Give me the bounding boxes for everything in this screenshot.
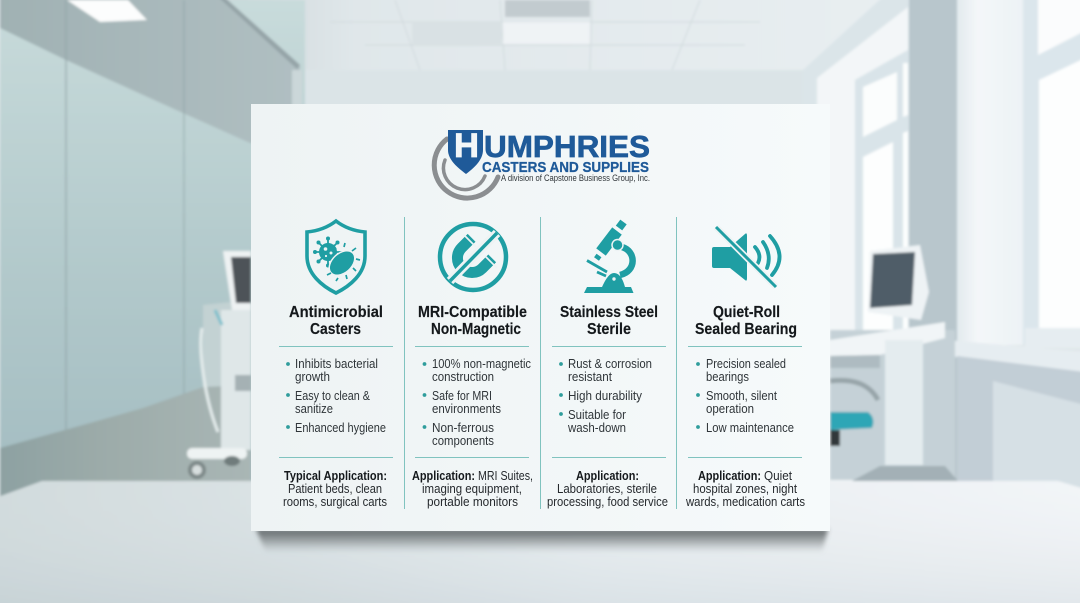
benefits list: 100% non-magnetic (432, 356, 531, 371)
logo subtitle: CASTERS AND SUPPLIES (482, 159, 649, 176)
card shadow (256, 529, 828, 553)
application text: processing, food service (547, 494, 668, 509)
rules (688, 346, 802, 458)
benefits list: Inhibits bacterial (295, 356, 378, 371)
application text: Typical Application: (284, 468, 387, 483)
application text: wards, medication carts (685, 494, 805, 509)
title: Non-Magnetic (431, 321, 521, 338)
column: stainless steel (547, 222, 668, 509)
icon: shield with microbes (307, 221, 365, 293)
benefits list: Low maintenance (706, 420, 794, 435)
application text: hospital zones, night (693, 481, 797, 496)
logo shield with H (448, 127, 483, 174)
benefits list: bearings (706, 369, 749, 384)
icon: muted speaker (712, 227, 780, 287)
title: Antimicrobial (289, 304, 383, 321)
application text: portable monitors (427, 494, 518, 509)
white card panel (251, 104, 830, 531)
benefits list (286, 356, 386, 435)
logo (434, 127, 650, 198)
application text (685, 468, 805, 509)
title: Casters (310, 321, 361, 338)
benefits list: Safe for MRI (432, 388, 492, 403)
glass partition (0, 0, 305, 500)
benefits list (696, 356, 794, 435)
ceiling (222, 0, 885, 70)
back wall (300, 70, 820, 110)
rules (279, 346, 393, 458)
title (418, 304, 527, 338)
benefits list: Smooth, silent (706, 388, 777, 403)
title (560, 304, 658, 338)
benefits list: Easy to clean & (295, 388, 370, 403)
benefits list: wash-down (567, 420, 626, 435)
application text: rooms, surgical carts (283, 494, 387, 509)
title: Quiet-Roll (713, 304, 780, 321)
benefits list: operation (706, 401, 754, 416)
title: MRI-Compatible (418, 304, 527, 321)
title: Sterile (587, 321, 631, 338)
title (289, 304, 383, 338)
column: antimicrobial casters (279, 221, 393, 509)
application text: Quiet (764, 468, 792, 483)
icon: crossed-out magnet (440, 224, 506, 290)
title: Sealed Bearing (695, 321, 797, 338)
application text: Application: (576, 468, 639, 483)
column dividers (404, 217, 676, 509)
benefits list: components (432, 433, 494, 448)
benefits list: resistant (568, 369, 612, 384)
application text: Application: (412, 468, 475, 483)
benefits list (423, 356, 531, 448)
right monitor and dental cart (830, 245, 958, 481)
application text (412, 468, 533, 509)
left medical cart and monitor (187, 251, 251, 479)
benefits list: Enhanced hygiene (295, 420, 386, 435)
benefits list: environments (432, 401, 501, 416)
application text: Application: (698, 468, 761, 483)
benefits list: construction (432, 369, 494, 384)
logo division line: A division of Capstone Business Group, Inc. (501, 173, 650, 183)
right wall and windows (803, 0, 1080, 490)
column: MRI-compatible (412, 224, 533, 509)
table top (0, 481, 1080, 603)
benefits list (559, 356, 652, 435)
logo rings (434, 139, 498, 198)
benefits list: High durability (568, 388, 642, 403)
benefits list: Suitable for (568, 407, 627, 422)
benefits list: sanitize (295, 401, 333, 416)
benefits list: Non-ferrous (432, 420, 494, 435)
rules (415, 346, 529, 458)
title: Stainless Steel (560, 304, 658, 321)
logo shield with H: H (454, 127, 479, 165)
application text: Patient beds, clean (288, 481, 382, 496)
application text: Laboratories, sterile (557, 481, 657, 496)
application text (547, 468, 668, 509)
title (695, 304, 797, 338)
application text: MRI Suites, (478, 468, 533, 483)
icon: microscope (584, 222, 634, 293)
logo wordmark: UMPHRIES (484, 129, 650, 164)
rules (552, 346, 666, 458)
application text (283, 468, 387, 509)
column: quiet-roll (685, 227, 805, 509)
benefits list: Rust & corrosion (568, 356, 652, 371)
benefits list: Precision sealed (706, 356, 786, 371)
application text: imaging equipment, (422, 481, 522, 496)
benefits list: growth (295, 369, 330, 384)
